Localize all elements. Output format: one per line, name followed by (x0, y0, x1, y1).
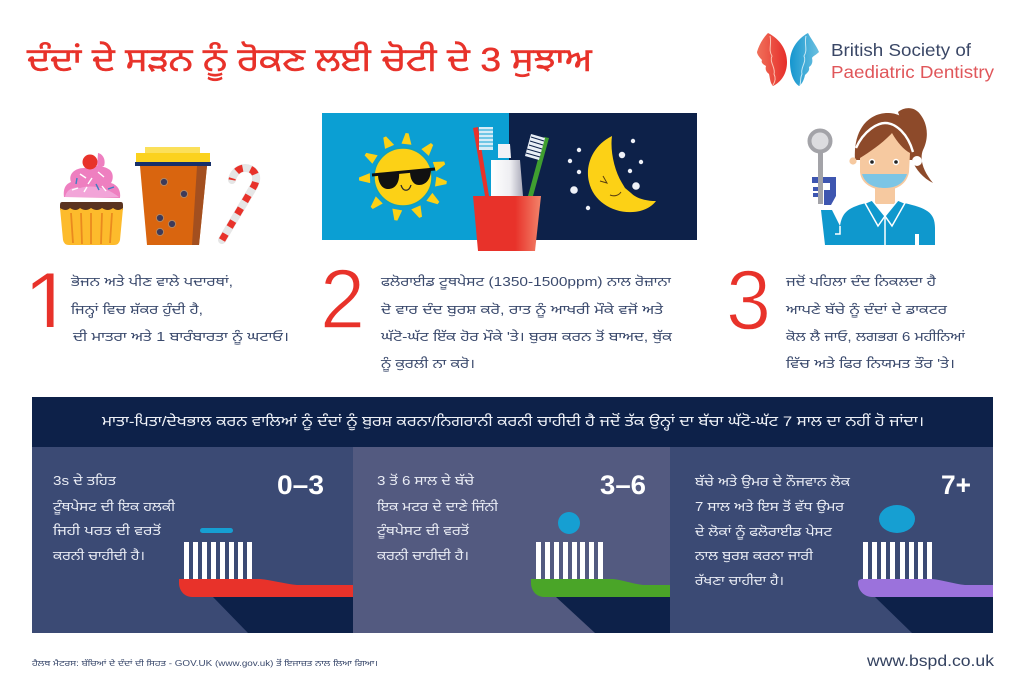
tip 2 (320, 252, 673, 372)
panel 1 text: ਟੂੰਥਪੇਸਟ ਦੀ ਇਕ ਹਲਕੀ (52, 499, 176, 515)
panel 2 text: ਕਰਨੀ ਚਾਹੀਦੀ ਹੈ। (376, 548, 469, 563)
panel 3 text: ਬੱਚੇ ਅਤੇ ਉਮਰ ਦੇ ਨੌਜਵਾਨ ਲੋਕ (694, 474, 851, 489)
icon: bristles (536, 542, 603, 579)
tip 1 text: ਜਿਨ੍ਹਾਂ ਵਿਚ ਸ਼ੱਕਰ ਹੁੰਦੀ ਹੈ, (70, 302, 203, 318)
shadow (213, 597, 353, 633)
tip 3 text (785, 274, 965, 371)
tip 3 text: ਆਪਣੇ ਬੱਚੇ ਨੂੰ ਦੰਦਾਂ ਦੇ ਡਾਕਟਰ (785, 302, 948, 318)
face (860, 133, 910, 190)
hand (812, 177, 836, 205)
panel: ages 0-3 (32, 447, 353, 633)
footer source note: ਹੈਲਥ ਮੈਟਰਸ: ਬੱਚਿਆਂ ਦੇ ਦੰਦਾਂ ਦੀ ਸਿਹਤ - GOV.UK (www.gov.uk) ਤੋਂ ਇਜਾਜ਼ਤ ਨਾਲ ਲਿਆ ਗਿਆ। (31, 659, 378, 668)
icon: takeaway cup (135, 147, 211, 245)
icon: blue face profile (790, 33, 819, 86)
panel 3 text: 7 ਸਾਲ ਅਤੇ ਇਸ ਤੋਂ ਵੱਧ ਉਮਰ (695, 499, 845, 514)
icon: candy cane (222, 168, 256, 240)
panel 2 text: ਟੂੰਥਪੇਸਟ ਦੀ ਵਰਤੋਂ (376, 523, 470, 539)
icon: purple brush handle (858, 579, 993, 597)
icon: bristles (863, 542, 932, 579)
panel 3 text (694, 474, 851, 588)
panel 2 text (376, 473, 499, 563)
logo wordmark: British Society of (831, 40, 971, 60)
day panel (322, 113, 509, 240)
shadow (556, 597, 670, 633)
panel 2 text: ਇਕ ਮਟਰ ਦੇ ਦਾਣੇ ਜਿੰਨੀ (376, 499, 499, 514)
number 3: 3 (726, 253, 771, 347)
tip 1 text: ਦੀ ਮਾਤਰਾ ਅਤੇ 1 ਬਾਰੰਬਾਰਤਾ ਨੂੰ ਘਟਾਓ। (72, 329, 289, 345)
tip 2 text: ਨੂੰ ਕੁਰਲੀ ਨਾ ਕਰੋ। (380, 356, 475, 372)
illustration: day and night brushing (322, 113, 697, 251)
panel: ages 3-6 (353, 447, 670, 633)
icon: green brush handle (531, 579, 670, 597)
tip 2 text: ਦੋ ਵਾਰ ਦੰਦ ਬੁਰਸ਼ ਕਰੋ, ਰਾਤ ਨੂੰ ਆਖਰੀ ਮੌਕੇ ਵਜੋਂ ਅਤੇ (380, 302, 664, 318)
mask (862, 174, 907, 188)
tip 3 text: ਕੋਲ ਲੈ ਜਾਓ, ਲਗਭਗ 6 ਮਹੀਨਿਆਂ (785, 329, 965, 344)
panel 3 text: ਰੱਖਣਾ ਚਾਹੀਦਾ ਹੈ। (694, 573, 784, 588)
uniform (821, 203, 935, 245)
number 1: 1 (23, 254, 74, 356)
number 2: 2 (320, 252, 365, 346)
tip 3 text: ਵਿੱਚ ਅਤੇ ਫਿਰ ਨਿਯਮਤ ਤੌਰ 'ਤੇ। (785, 356, 955, 371)
footer website: www.bspd.co.uk (866, 653, 995, 670)
icon: toothpaste tube (491, 144, 523, 196)
tip 2 text: ਘੱਟੋ-ਘੱਟ ਇੱਕ ਹੋਰ ਮੌਕੇ 'ਤੇ। ਬੁਰਸ਼ ਕਰਨ ਤੋਂ ਬਾਅਦ, ਥੁੱਕ (380, 329, 673, 344)
panel 3 text: ਦੇ ਲੋਕਾਂ ਨੂੰ ਫਲੋਰਾਈਡ ਪੇਸਟ (694, 524, 833, 540)
icon: cupcake (60, 153, 123, 245)
logo wordmark (831, 40, 994, 82)
dental mirror (810, 130, 830, 204)
logo wordmark: Paediatric Dentistry (831, 62, 994, 82)
hair (855, 113, 914, 160)
night panel (509, 113, 697, 240)
icon: green toothbrush (525, 134, 549, 196)
icon: red brush handle (179, 579, 353, 597)
panel 1 text (52, 473, 176, 563)
icon: bristles (184, 542, 252, 579)
icon: red toothbrush (473, 127, 493, 196)
age label 0-3: 0–3 (277, 470, 324, 500)
toothpaste smear (200, 528, 233, 533)
panel: ages 7+ (670, 447, 993, 633)
neck (875, 188, 895, 204)
panel 1 text: ਜਿਹੀ ਪਰਤ ਦੀ ਵਰਤੋਂ (52, 523, 162, 538)
icon: red face profile (757, 33, 787, 86)
tip 1 text: ਭੋਜਨ ਅਤੇ ਪੀਣ ਵਾਲੇ ਪਦਾਰਥਾਂ, (70, 274, 233, 289)
icon: sun with sunglasses (359, 133, 447, 221)
panel 1 text: ਕਰਨੀ ਚਾਹੀਦੀ ਹੈ। (52, 548, 145, 563)
logo: British Society of Paediatric Dentistry (757, 33, 994, 86)
toothpaste blob (879, 505, 915, 533)
title: ਦੰਦਾਂ ਦੇ ਸੜਨ ਨੂੰ ਰੋਕਣ ਲਈ ਚੋਟੀ ਦੇ 3 ਸੁਝਾਅ (26, 40, 593, 81)
icon: sleeping moon (568, 136, 656, 212)
banner: parents supervise brushing: ਮਾਤਾ-ਪਿਤਾ/ਦੇਖਭਾਲ ਕਰਨ ਵਾਲਿਆਂ ਨੂੰ ਦੰਦਾਂ ਨੂੰ ਬੁਰਸ਼ ਕਰਨਾ/ਨਿਗਰਾਨੀ ਕਰਨੀ ਚਾਹੀਦੀ ਹੈ ਜਦੋਂ ਤੱਕ ਉਨ੍ਹਾਂ ਦਾ ਬੱਚਾ ਘੱਟੋ-ਘੱਟ 7 ਸਾਲ ਦਾ ਨਹੀਂ ਹੋ ਜਾਂਦਾ। (101, 412, 924, 431)
icon: dentist (810, 108, 935, 245)
shadow (875, 597, 993, 633)
tip 3 (726, 253, 965, 371)
panel 3 text: ਨਾਲ ਬੁਰਸ਼ ਕਰਨਾ ਜਾਰੀ (694, 548, 814, 563)
tip 2 text (380, 274, 673, 372)
age label 3-6: 3–6 (600, 470, 646, 500)
age label 7+: 7+ (941, 470, 971, 500)
tip 1 (32, 274, 288, 345)
ponytail (898, 108, 933, 183)
icon: red cup (473, 196, 541, 251)
panel 2 text: 3 ਤੋਂ 6 ਸਾਲ ਦੇ ਬੱਚੇ (377, 473, 475, 488)
tip 2 text: ਫਲੋਰਾਈਡ ਟੂਥਪੇਸਟ (1350-1500ppm) ਨਾਲ ਰੋਜ਼ਾਨਾ (380, 274, 672, 290)
eyes (869, 159, 899, 165)
tip 1 text (70, 274, 289, 345)
banner: parents supervise brushing (32, 397, 993, 447)
tip 3 text: ਜਦੋਂ ਪਹਿਲਾ ਦੰਦ ਨਿਕਲਦਾ ਹੈ (785, 274, 937, 289)
panel 1 text: 3s ਦੇ ਤਹਿਤ (53, 473, 117, 488)
toothpaste pea (558, 512, 580, 534)
hair band (856, 123, 913, 152)
